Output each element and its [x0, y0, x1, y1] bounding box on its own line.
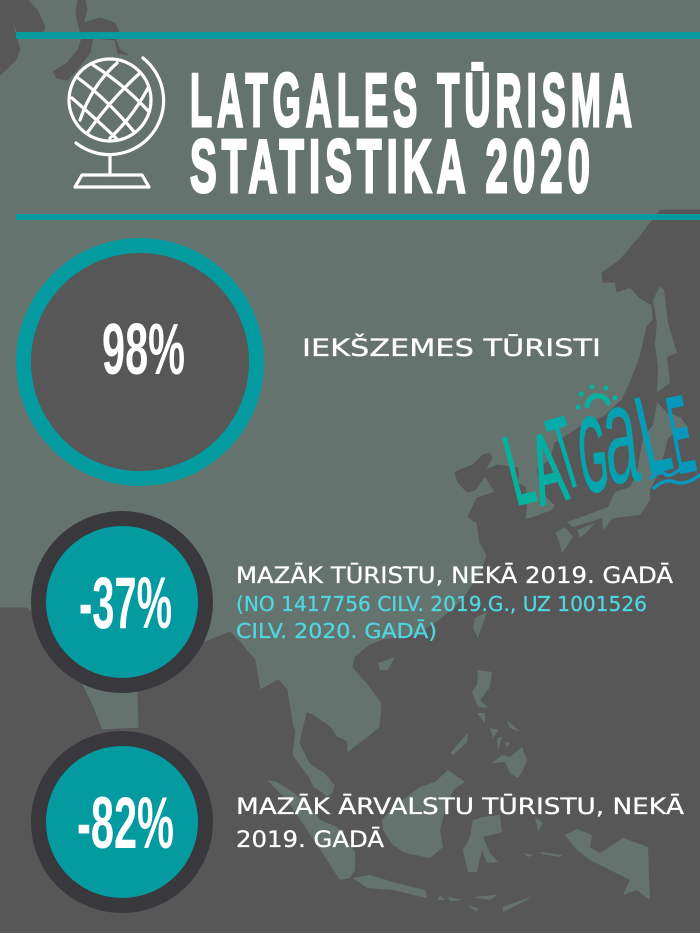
top divider	[16, 32, 700, 39]
logo: Latgale: a	[595, 354, 646, 514]
text: fewer tourists than 2019	[236, 563, 673, 643]
icon: globe	[69, 58, 164, 187]
text: fewer tourists than 2019: (NO 1417756 CILV. 2019.G., UZ 1001526	[236, 592, 647, 616]
logo: Latgale: G	[573, 395, 613, 515]
logo: Latgale: L	[626, 371, 680, 496]
stat circle: -82%: -82%	[77, 783, 174, 864]
logo: Latgale: T	[538, 396, 591, 509]
text: fewer tourists than 2019: MAZĀK TŪRISTU, NEKĀ 2019. GADĀ	[236, 563, 673, 589]
logo: Latgale: A	[520, 413, 576, 526]
stat circle: 98%	[24, 246, 256, 478]
title	[190, 58, 637, 208]
logo: Latgale	[495, 354, 700, 526]
text: fewer foreign tourists than 2019	[236, 794, 684, 853]
logo: Latgale: L	[495, 413, 543, 525]
text: fewer foreign tourists than 2019: 2019. GADĀ	[236, 828, 384, 853]
label: domestic tourists: IEKŠZEMES TŪRISTI	[302, 332, 601, 362]
text: fewer tourists than 2019: CILV. 2020. GADĀ)	[236, 619, 437, 643]
stat circle: -82%	[38, 738, 206, 906]
text: fewer foreign tourists than 2019: MAZĀK ĀRVALSTU TŪRISTU, NEKĀ	[236, 794, 684, 820]
stat circle: -37%	[38, 518, 206, 686]
bottom divider	[16, 214, 700, 220]
stat circle: 98%: 98%	[102, 310, 185, 390]
stat circle: -37%: -37%	[79, 563, 172, 644]
